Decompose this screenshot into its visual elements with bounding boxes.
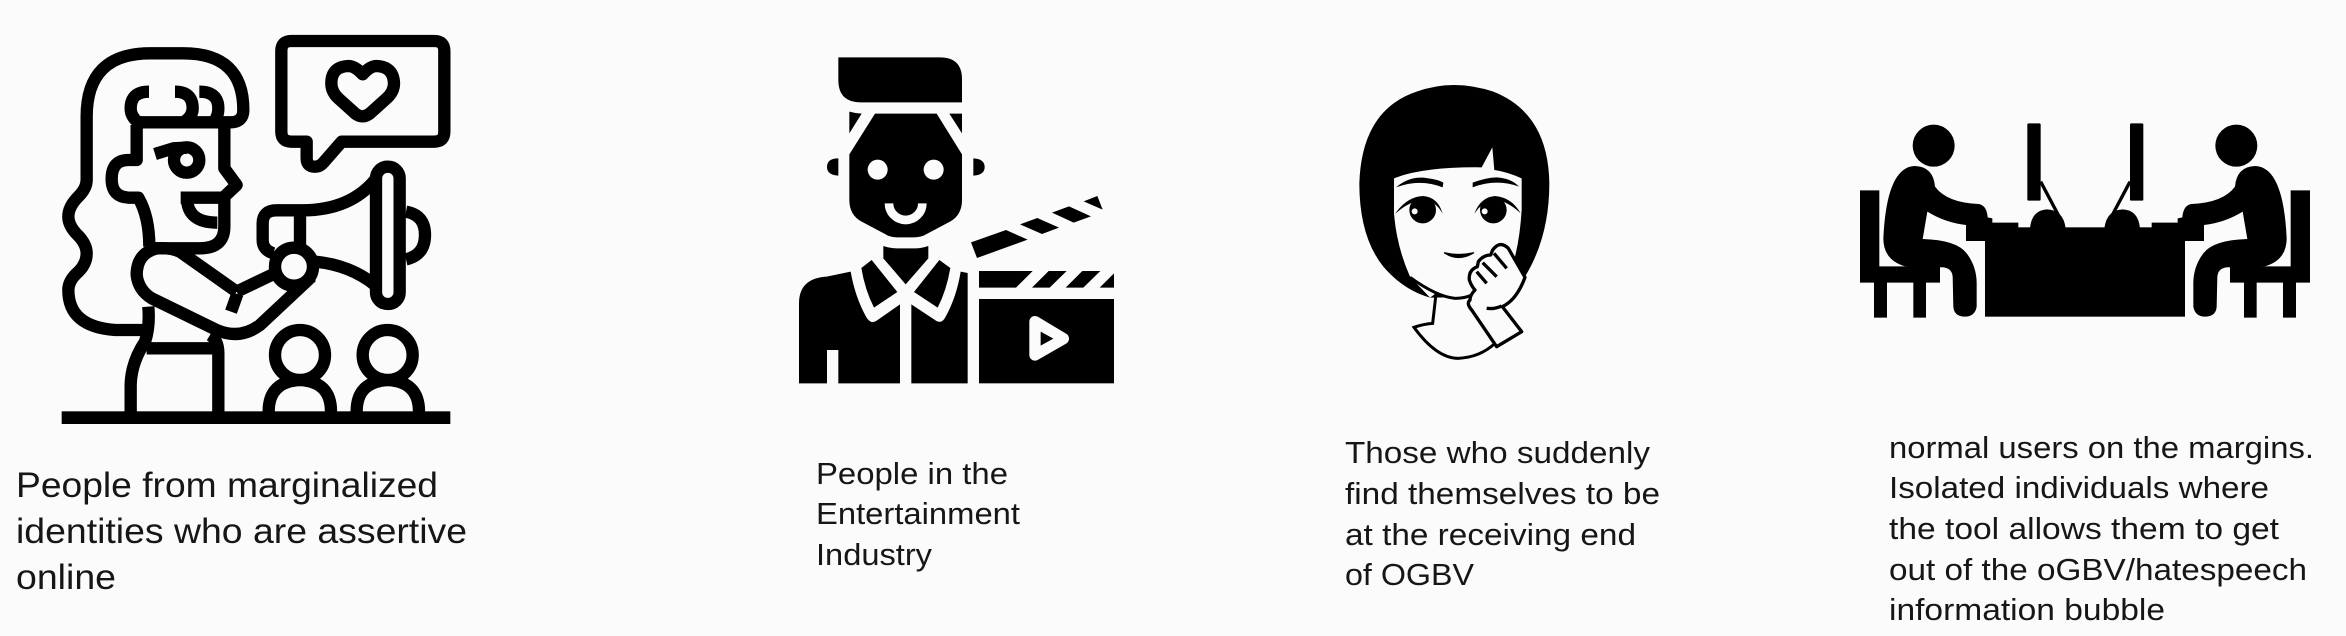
caption: normal users on the margins <box>1889 430 2314 627</box>
icon: two people at computers across a desk <box>1860 123 2310 318</box>
caption: marginalized identities: People from marginalized <box>16 466 438 505</box>
desk <box>1985 227 2185 317</box>
caption: normal users on the margins: out of the oGBV/hatespeech <box>1889 552 2307 587</box>
hair <box>1359 85 1549 298</box>
clapperboard <box>971 196 1114 383</box>
eyebrows <box>1396 178 1443 187</box>
jaw and neck outline <box>1410 277 1472 298</box>
left user <box>1860 123 2066 318</box>
arm <box>137 248 312 334</box>
caption: marginalized identities <box>16 466 467 597</box>
caption: normal users on the margins: information bubble <box>1889 592 2165 627</box>
eyes <box>1395 196 1443 214</box>
torso <box>131 307 218 412</box>
icon: woman with megaphone and audience <box>62 41 450 424</box>
speech bubble <box>281 41 444 167</box>
hair <box>68 53 243 330</box>
hand <box>1468 245 1525 347</box>
caption: normal users on the margins: normal users on the margins. <box>1889 430 2314 465</box>
hand <box>275 248 313 286</box>
caption: marginalized identities: identities who are assertive <box>16 512 467 551</box>
caption: receiving end of OGBV: Those who suddenly <box>1345 435 1651 470</box>
caption: entertainment industry: Industry <box>816 537 933 572</box>
caption: receiving end of OGBV: of OGBV <box>1345 557 1474 592</box>
caption: normal users on the margins: Isolated individuals where <box>1889 470 2269 505</box>
ground line <box>62 411 450 424</box>
icon: entertainment man with clapperboard <box>799 57 1114 383</box>
face <box>112 125 237 248</box>
mouth <box>1444 253 1474 258</box>
right user <box>2104 123 2310 318</box>
caption: marginalized identities: online <box>16 558 116 597</box>
caption: receiving end of OGBV: find themselves to be <box>1345 476 1660 511</box>
eye <box>155 148 187 154</box>
man <box>799 57 985 383</box>
caption: receiving end of OGBV: at the receiving end <box>1345 517 1636 552</box>
caption: receiving end of OGBV <box>1345 435 1660 592</box>
mouth <box>181 198 223 223</box>
caption: entertainment industry: Entertainment <box>816 496 1020 531</box>
icon: girl with bob haircut, hand on chin <box>1359 85 1549 358</box>
audience <box>275 330 325 380</box>
caption: entertainment industry: People in the <box>816 456 1008 491</box>
face <box>1394 147 1522 303</box>
caption: entertainment industry <box>816 456 1020 572</box>
megaphone <box>263 180 425 285</box>
caption: normal users on the margins: the tool allows them to get <box>1889 511 2279 546</box>
heart <box>331 66 394 116</box>
